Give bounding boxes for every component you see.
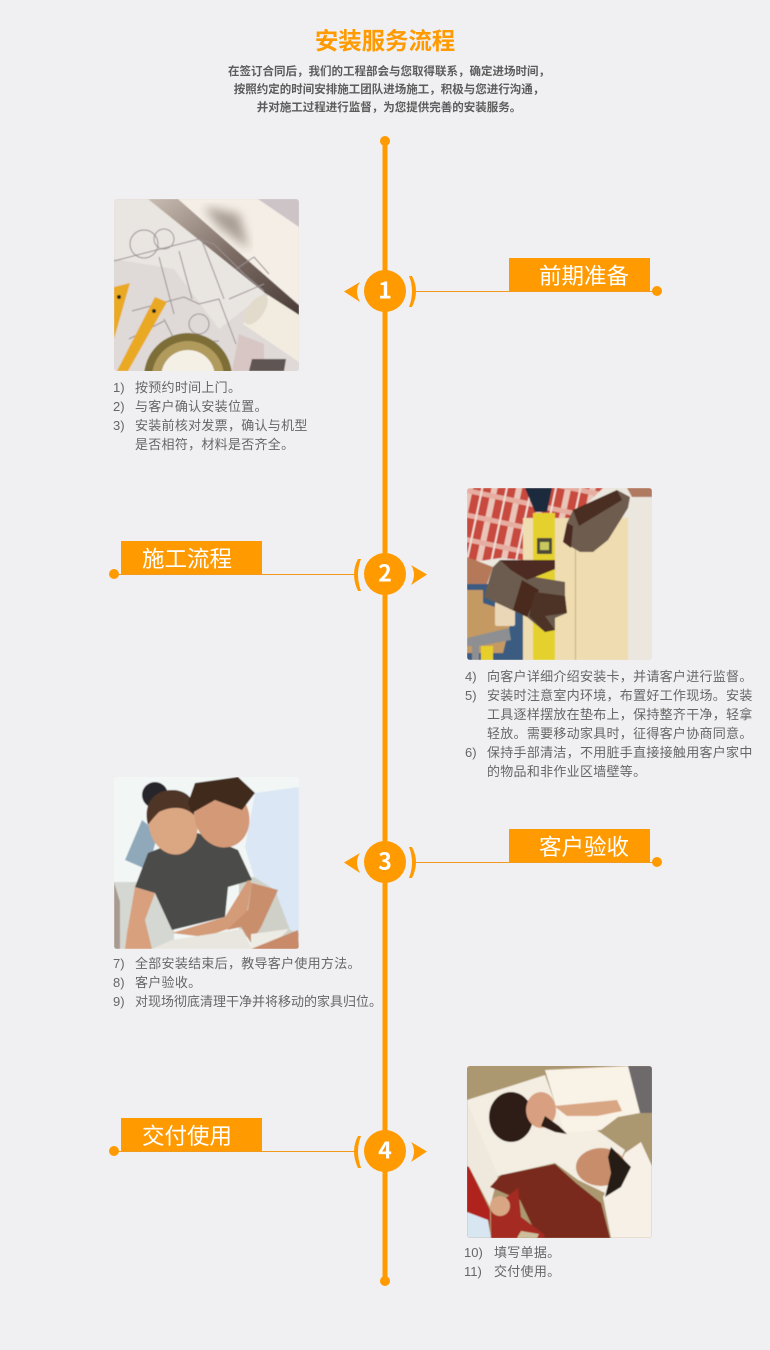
step 2 list: 轻放。需要移动家具时，征得客户协商同意。 <box>487 726 753 741</box>
photo: blueprints <box>114 199 299 371</box>
step 4 list: 填写单据。 <box>494 1245 560 1260</box>
step 2 label <box>121 541 262 574</box>
step 3 list <box>113 956 382 1009</box>
step 1 list: 与客户确认安装位置。 <box>135 398 268 414</box>
intro text: 在签订合同后，我们的工程部会与您取得联系，确定进场时间， <box>228 66 550 78</box>
intro text <box>228 65 550 114</box>
step 2 marker: 2 <box>378 554 392 588</box>
photo: technician and customer <box>114 777 299 949</box>
step 2 panel <box>109 488 753 779</box>
step 1 list: 1) <box>113 380 125 394</box>
step 1 panel <box>113 199 662 452</box>
step 2 list: 4) <box>465 669 477 684</box>
step 2 list: 工具逐样摆放在垫布上，保持整齐干净，轻拿 <box>487 707 753 722</box>
step 3 panel <box>113 777 662 1009</box>
step 3 list: 7) <box>113 956 125 971</box>
step 1 list: 安装前核对发票，确认与机型 <box>135 418 308 432</box>
step 4 list: 11) <box>464 1264 482 1279</box>
photo: couple relaxing <box>467 1066 652 1238</box>
step 1 label: 前期准备 <box>539 264 629 289</box>
step 2 list: 6) <box>465 745 477 760</box>
intro text: 并对施工过程进行监督，为您提供完善的安装服务。 <box>257 102 521 114</box>
step 1 list: 按预约时间上门。 <box>135 380 241 394</box>
step 2 label: 施工流程 <box>142 547 232 572</box>
step 3 list: 8) <box>113 975 125 990</box>
step 4 marker: 4 <box>378 1132 392 1166</box>
step 2 list: 安装时注意室内环境，布置好工作现场。安装 <box>487 688 753 703</box>
photo: level and gloves <box>467 488 652 660</box>
step 2 list: 的物品和非作业区墙壁等。 <box>487 764 646 779</box>
step 3 marker: 3 <box>378 842 392 876</box>
step 4 list <box>464 1245 560 1279</box>
step 1 list <box>113 380 308 452</box>
title: 安装服务流程 <box>315 28 455 54</box>
step 4 marker <box>109 1130 427 1172</box>
step 3 list: 客户验收。 <box>135 975 201 990</box>
step 4 panel <box>109 1066 652 1279</box>
step 3 list: 9) <box>113 994 125 1009</box>
step 1 list: 2) <box>113 398 125 414</box>
intro text: 按照约定的时间安排施工团队进场施工，积极与您进行沟通， <box>234 84 544 96</box>
step 3 label: 客户验收 <box>539 835 629 860</box>
step 3 list: 全部安装结束后，教导客户使用方法。 <box>135 956 361 971</box>
step 1 label <box>509 258 650 291</box>
timeline axis <box>380 136 390 1286</box>
step 1 list: 是否相符，材料是否齐全。 <box>135 436 294 452</box>
step 2 marker <box>109 553 427 595</box>
step 4 list: 交付使用。 <box>494 1264 560 1279</box>
step 2 list: 保持手部清洁，不用脏手直接接触用客户家中 <box>487 745 753 760</box>
step 4 list: 10) <box>464 1245 483 1260</box>
step 4 label <box>121 1118 262 1151</box>
step 1 marker <box>344 270 662 312</box>
step 1 list: 3) <box>113 418 125 432</box>
step 2 list: 5) <box>465 688 477 703</box>
step 1 marker: 1 <box>378 272 392 306</box>
step 4 label: 交付使用 <box>142 1124 232 1149</box>
step 3 label <box>509 829 650 862</box>
step 3 list: 对现场彻底清理干净并将移动的家具归位。 <box>135 994 382 1009</box>
step 3 marker <box>344 841 662 883</box>
step 2 list: 向客户详细介绍安装卡，并请客户进行监督。 <box>487 669 753 684</box>
step 2 list <box>465 669 753 779</box>
